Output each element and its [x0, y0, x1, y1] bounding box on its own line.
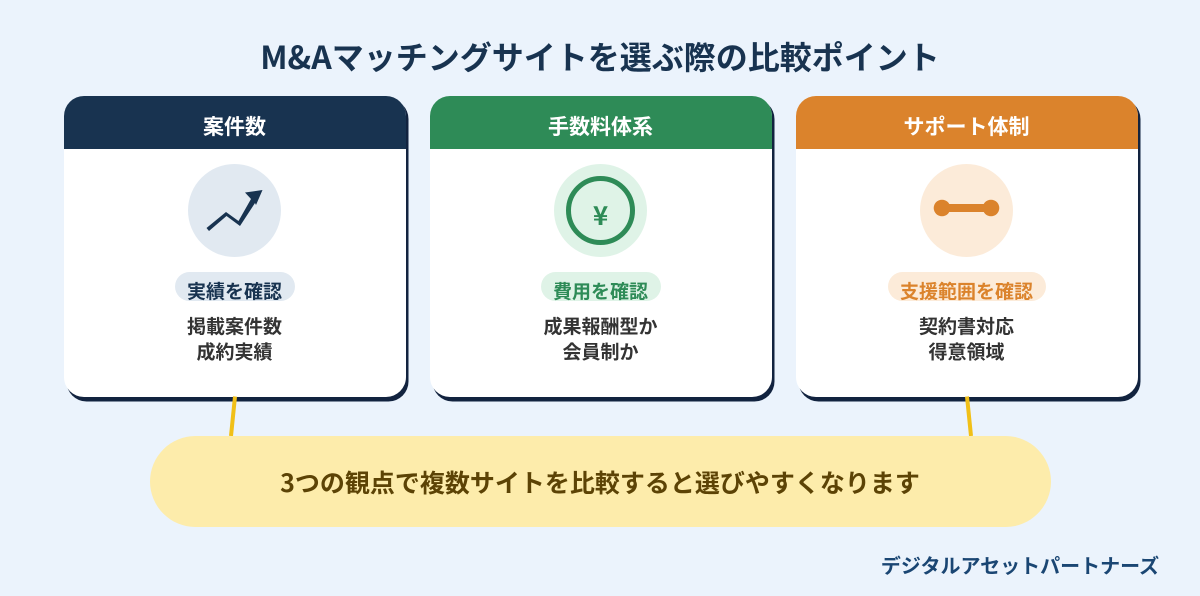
badge: 実績を確認	[175, 272, 295, 304]
text: 成果報酬型か 会員制か: 成果報酬型か	[543, 312, 658, 339]
icon: linked nodes	[920, 164, 1013, 257]
badge: 支援範囲を確認: 支援範囲を確認	[900, 277, 1033, 304]
badge: 費用を確認: 費用を確認	[553, 277, 648, 304]
connector: right card to callout	[967, 396, 971, 436]
text: 契約書対応 得意領域: 得意領域	[928, 338, 1005, 364]
badge: 費用を確認	[541, 272, 661, 304]
text: 掲載案件数 成約実績	[187, 312, 282, 364]
callout	[150, 436, 1051, 527]
text: 掲載案件数 成約実績: 掲載案件数	[187, 312, 282, 339]
panel header: 案件数	[64, 96, 406, 149]
panel header: サポート体制	[796, 96, 1138, 149]
icon: yen coin	[554, 164, 647, 257]
text: 掲載案件数 成約実績: 成約実績	[196, 338, 273, 364]
text: 成果報酬型か 会員制か: 会員制か	[562, 338, 639, 364]
panel header: 手数料体系	[430, 96, 772, 149]
header label: 案件数: 案件数	[203, 111, 266, 141]
panel: 案件数	[64, 96, 408, 402]
title: M&Aマッチングサイトを選ぶ際の比較ポイント	[260, 33, 940, 79]
header label: 手数料体系: 手数料体系	[548, 111, 653, 141]
brand credit: デジタルアセットパートナーズ	[881, 550, 1159, 579]
badge: 実績を確認: 実績を確認	[187, 277, 282, 304]
icon: yen coin: ¥	[593, 196, 608, 233]
connector: left card to callout	[231, 396, 235, 436]
text: 契約書対応 得意領域: 契約書対応	[919, 312, 1014, 339]
text: 成果報酬型か 会員制か	[543, 312, 658, 364]
callout: 3つの観点で複数サイトを比較すると選びやすくなります	[280, 464, 920, 500]
icon: rising arrow	[188, 164, 281, 257]
header label: サポート体制: サポート体制	[904, 111, 1030, 141]
panel: 手数料体系	[430, 96, 774, 402]
panel: サポート体制	[796, 96, 1140, 402]
text: 契約書対応 得意領域	[919, 312, 1014, 364]
